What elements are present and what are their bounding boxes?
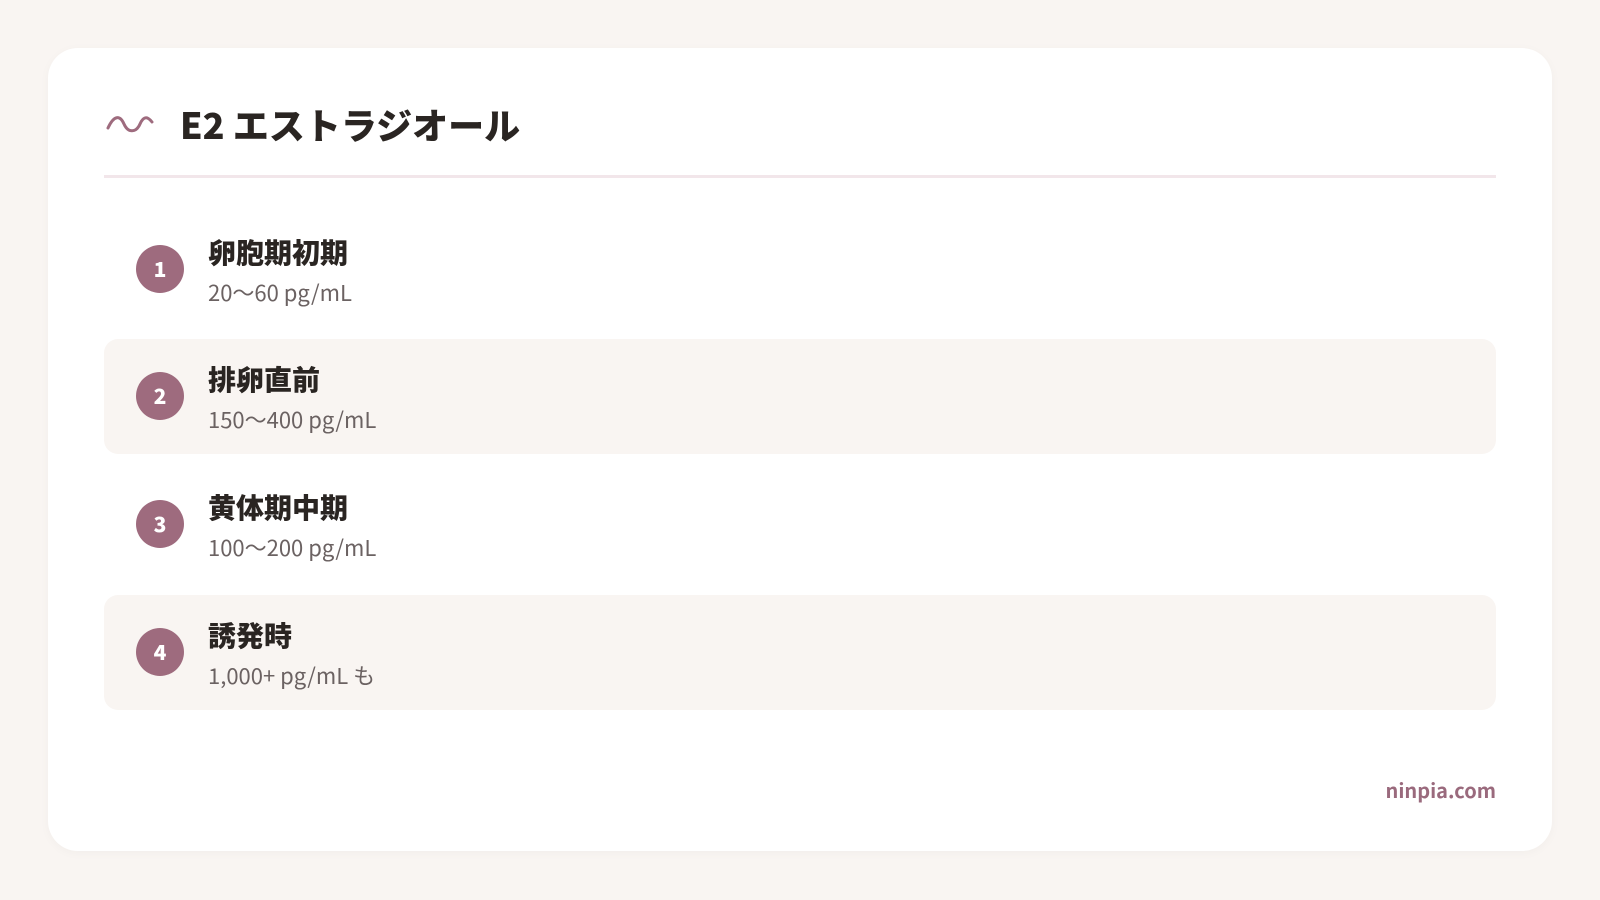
row 1 bbox=[136, 232, 352, 308]
badge 2 bbox=[136, 372, 184, 420]
value 3: 100〜200 pg/mL bbox=[208, 531, 376, 563]
label 4: 誘発時 bbox=[208, 615, 292, 655]
badge 3 bbox=[136, 500, 184, 548]
badge 1 bbox=[136, 245, 184, 293]
row 4 bbox=[104, 595, 1496, 710]
icon: wave bbox=[106, 116, 154, 132]
label 3: 黄体期中期 bbox=[208, 487, 348, 527]
value 2: 150〜400 pg/mL bbox=[208, 403, 376, 435]
footer brand: ninpia.com bbox=[1386, 775, 1496, 804]
badge 4 bbox=[136, 628, 184, 676]
badge 2: 2 bbox=[154, 381, 166, 411]
badge 1: 1 bbox=[154, 254, 166, 284]
label 1: 卵胞期初期 bbox=[208, 232, 348, 272]
row 3 bbox=[136, 487, 376, 563]
badge 3: 3 bbox=[154, 509, 166, 539]
value 4: 1,000+ pg/mL も bbox=[208, 659, 375, 691]
row 2 bbox=[104, 339, 1496, 454]
label 2: 排卵直前 bbox=[208, 359, 320, 399]
title: E2 エストラジオール bbox=[180, 98, 520, 150]
value 1: 20〜60 pg/mL bbox=[208, 276, 352, 308]
badge 4: 4 bbox=[154, 637, 166, 667]
